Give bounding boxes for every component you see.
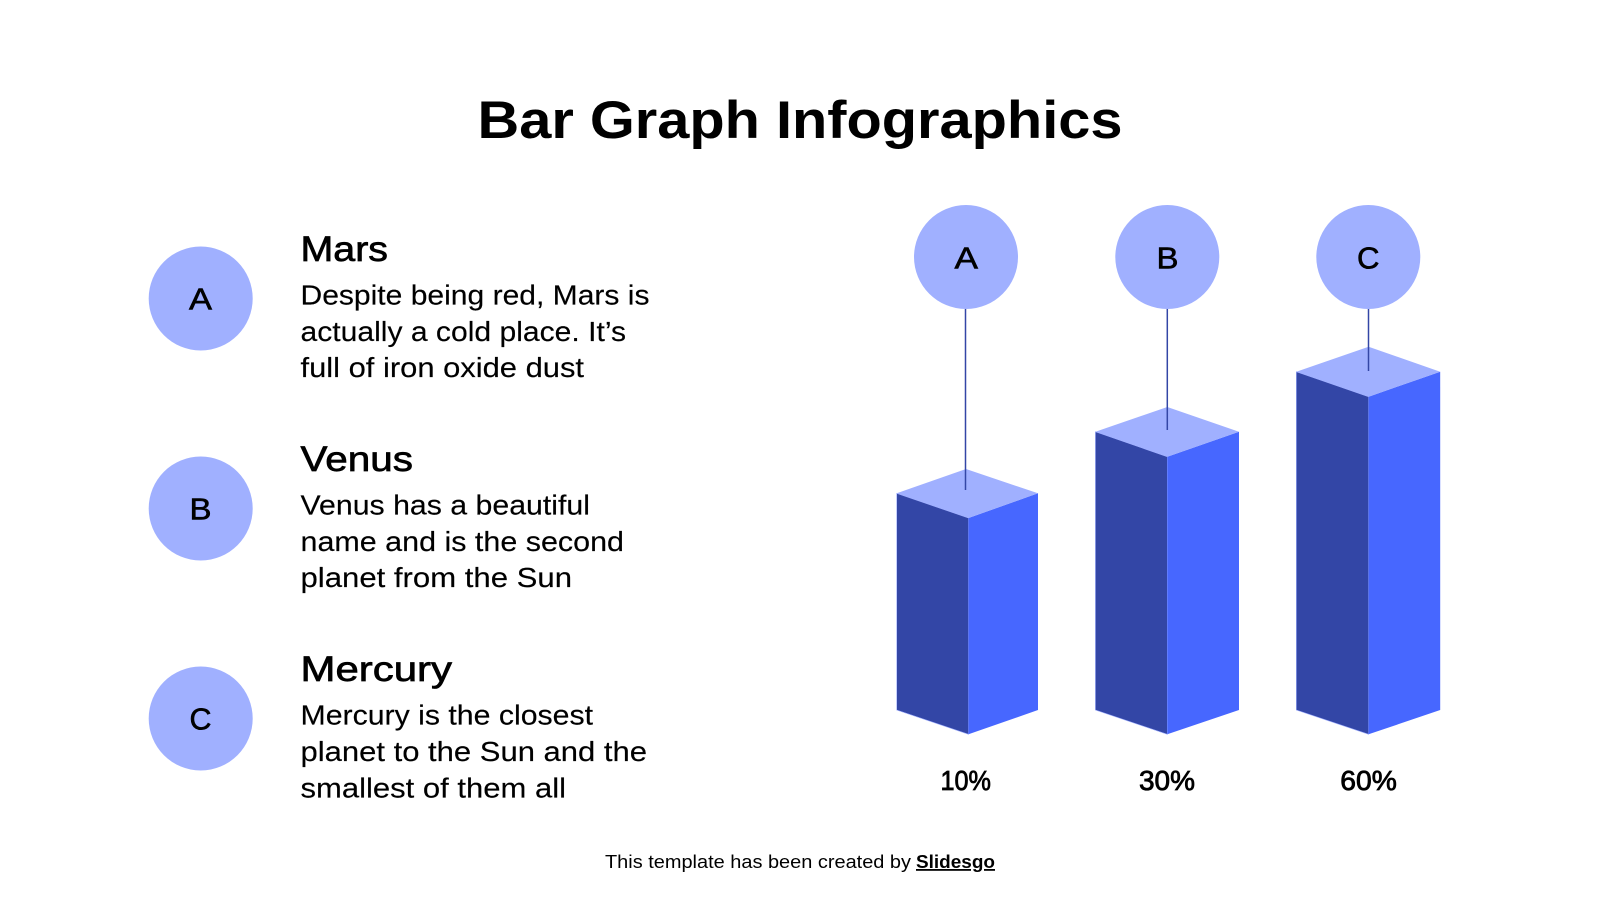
- heading: Venus: Venus: [300, 440, 413, 479]
- icon: circle A: [149, 246, 253, 350]
- footer credit: Slidesgo: [916, 852, 995, 872]
- title: Bar Graph Infographics: [478, 91, 1122, 150]
- text block: Mercury description: planet to the Sun and the: [300, 736, 647, 767]
- text block: Mercury description: smallest of them all: [300, 772, 566, 803]
- icon: circle C: [149, 666, 253, 770]
- panel: legend item A Mars: [149, 230, 649, 383]
- text block: Venus description: planet from the Sun: [300, 562, 572, 593]
- panel: legend item B Venus: [149, 440, 624, 593]
- bar A 10%: A: [954, 241, 978, 276]
- footer credit: This template has been created by: [605, 852, 911, 872]
- bar C 60%: C: [1357, 241, 1380, 276]
- text block: Venus description: name and is the second: [300, 526, 624, 557]
- bar B 30%: [1095, 205, 1239, 796]
- panel: legend item C Mercury: [149, 650, 647, 803]
- icon: circle A: A: [189, 281, 212, 316]
- heading: Mars: Mars: [300, 230, 388, 269]
- bar chart: [897, 205, 1440, 796]
- icon: circle B: B: [190, 491, 212, 526]
- text block: Mars description: actually a cold place. It’s: [300, 316, 626, 347]
- bar A 10%: [897, 205, 1038, 796]
- text block: Venus description: [300, 489, 624, 593]
- text block: Mercury description: [300, 699, 647, 803]
- icon: circle C: C: [190, 701, 212, 736]
- bar C 60%: 60%: [1340, 765, 1397, 796]
- text block: Mars description: Despite being red, Mars is: [300, 279, 650, 310]
- bar A 10%: 10%: [940, 765, 991, 796]
- bar B 30%: B: [1156, 241, 1178, 276]
- text block: Mars description: full of iron oxide dust: [300, 352, 584, 383]
- text block: Mars description: [300, 279, 650, 383]
- bar C 60%: [1296, 205, 1440, 796]
- bar B 30%: 30%: [1139, 765, 1195, 796]
- text block: Mercury description: Mercury is the closest: [300, 699, 593, 730]
- heading: Mercury: Mercury: [300, 650, 453, 689]
- text block: Venus description: Venus has a beautiful: [300, 489, 590, 520]
- icon: circle B: [149, 456, 253, 560]
